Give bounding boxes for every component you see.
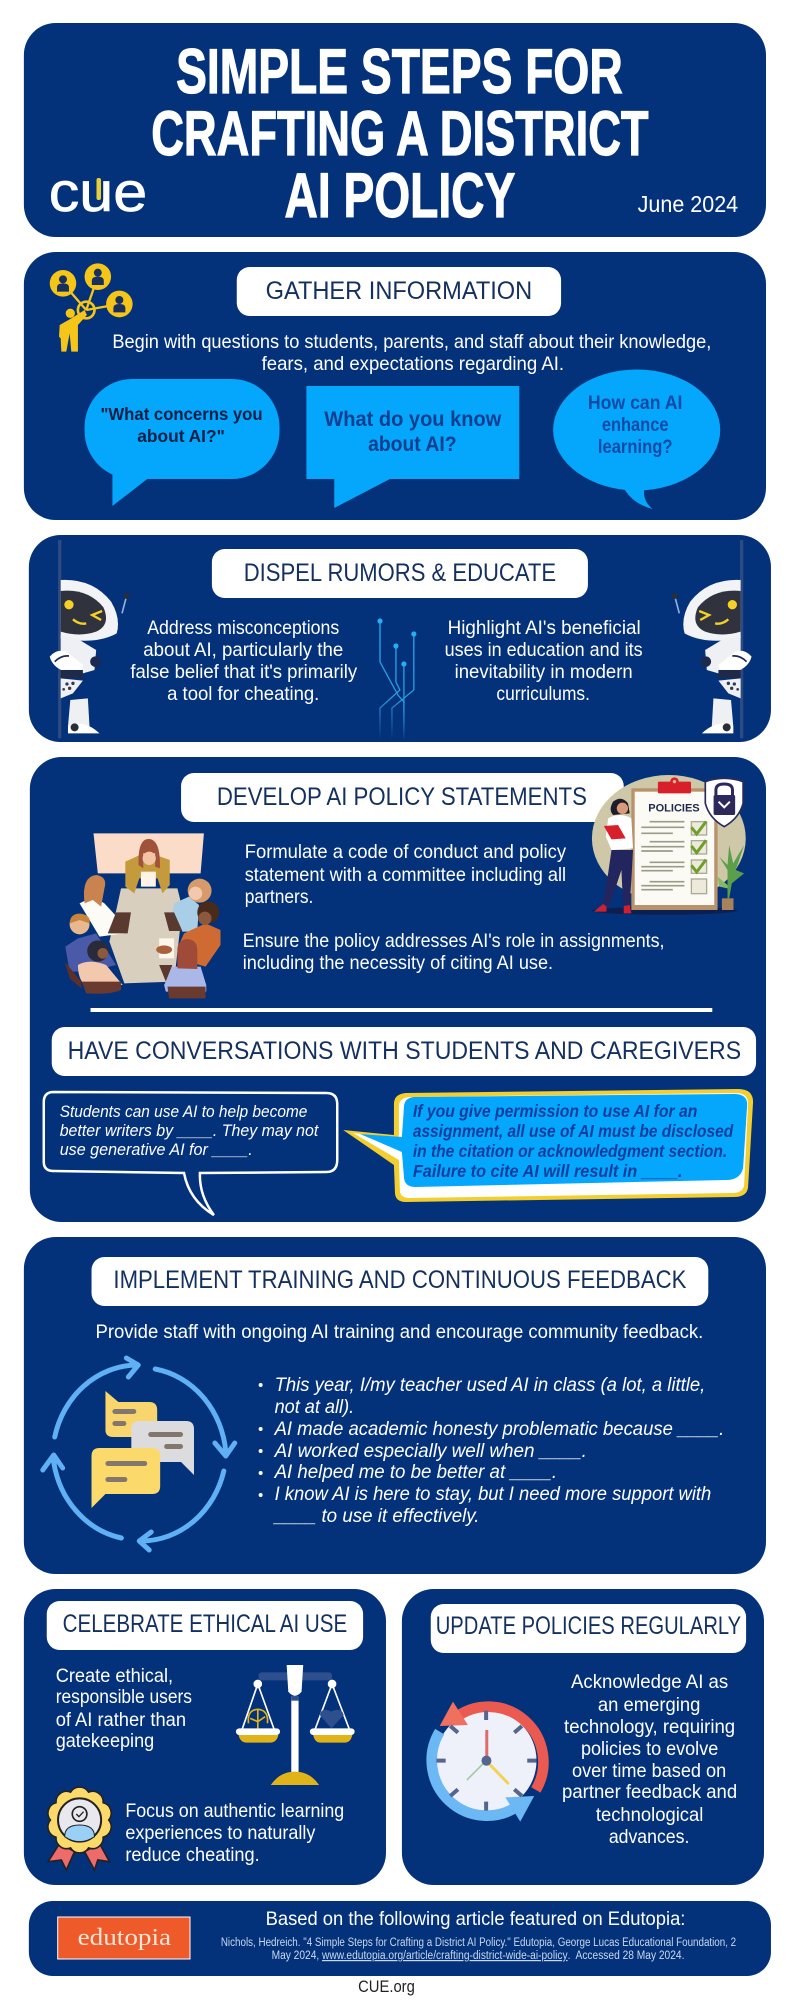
bullet list: AI worked especially well when ____. (274, 1441, 587, 1462)
icon: award badge (48, 1787, 111, 1870)
illustration: policies clipboard: POLICIES (648, 802, 700, 814)
callout: student bubble (44, 1092, 337, 1215)
text: acknowledge AI: technology, requiring (564, 1717, 735, 1738)
callout: student bubble: better writers by ____. They may not (60, 1121, 320, 1140)
text: source intro: Based on the following article featured on Edutopia: (266, 1909, 685, 1930)
heading: celebrate: CELEBRATE ETHICAL AI USE (63, 1610, 347, 1638)
footer: CUE.org: CUE.org (358, 1977, 415, 1996)
icon: circuit lines (377, 618, 416, 738)
text: authentic learning: experiences to naturally (125, 1823, 316, 1844)
speech bubble: enhance learning: enhance (602, 415, 669, 436)
speech bubble: what do you know: about AI? (368, 433, 457, 456)
panel: update policies (402, 1589, 764, 1885)
text: acknowledge AI: partner feedback and (562, 1782, 737, 1803)
bullet list: I know AI is here to stay, but I need more support with (275, 1484, 711, 1505)
logo: edutopia (58, 1917, 190, 1959)
speech bubble: concerns: about AI?" (137, 426, 225, 446)
text: code of conduct (245, 842, 567, 908)
callout: permission bubble: assignment, all use of AI must be disclosed (413, 1121, 733, 1141)
text: provide staff: Provide staff with ongoing AI training and encourage community feedback. (96, 1322, 703, 1343)
heading: have conversations (52, 1027, 756, 1076)
heading: update policies (431, 1604, 746, 1653)
icon: balance scale (236, 1665, 355, 1785)
panel: gather information (24, 252, 766, 520)
text: authentic learning (125, 1801, 344, 1866)
text: assignments (243, 931, 665, 974)
text: responsible users: Create ethical, (56, 1666, 173, 1687)
text: assignments: including the necessity of citing AI use. (243, 953, 553, 974)
heading: have conversations: HAVE CONVERSATIONS WITH STUDENTS AND CAREGIVERS (68, 1037, 741, 1065)
panel: celebrate ethical use (24, 1589, 386, 1885)
bullet list: ____ to use it effectively. (273, 1506, 479, 1527)
text: responsible users: gatekeeping (56, 1731, 154, 1752)
date: June 2024 (638, 191, 738, 217)
text: benefits: inevitability in modern (455, 662, 633, 683)
panel: title (24, 23, 766, 237)
illustration: policies clipboard (592, 775, 746, 915)
bullet list (259, 1375, 724, 1527)
text: acknowledge AI: over time based on (572, 1761, 726, 1782)
icon: feedback cycle (43, 1358, 235, 1550)
text: acknowledge AI: an emerging (598, 1695, 700, 1716)
robot: right (672, 540, 752, 738)
speech bubble: what do you know (306, 386, 519, 508)
text: misconceptions: false belief that it's primarily (130, 662, 358, 683)
callout: permission bubble (343, 1089, 753, 1202)
illustration: committee meeting (65, 833, 220, 998)
text: authentic learning: reduce cheating. (125, 1845, 260, 1866)
text: intro (112, 332, 711, 375)
text: benefits: Highlight AI's beneficial (448, 618, 641, 639)
text: code of conduct: Formulate a code of conduct and policy (245, 842, 567, 863)
text: misconceptions: Address misconceptions (147, 618, 339, 639)
heading: dispel rumors: DISPEL RUMORS & EDUCATE (244, 559, 556, 587)
text: benefits: uses in education and its (445, 640, 643, 661)
text: misconceptions: about AI, particularly the (143, 640, 343, 661)
text: misconceptions (130, 618, 358, 705)
title: AI POLICY (285, 161, 515, 231)
panel: source (29, 1901, 771, 1976)
heading: develop policy: DEVELOP AI POLICY STATEMENTS (217, 783, 587, 811)
text: acknowledge AI: Acknowledge AI as (571, 1672, 728, 1693)
logo: CUE: cue (49, 160, 147, 223)
text: benefits (445, 618, 643, 705)
text: misconceptions: a tool for cheating. (167, 684, 319, 705)
speech bubble: enhance learning: learning? (598, 437, 672, 458)
text: assignments: Ensure the policy addresses AI's role in assignments, (243, 931, 665, 952)
callout: student bubble: Students can use AI to help become (60, 1102, 307, 1121)
panel: policy statements and conversations (30, 757, 766, 1222)
callout: permission bubble: in the citation or acknowledgment section. (413, 1141, 727, 1161)
bullet list: AI helped me to be better at ____. (274, 1462, 557, 1483)
text: acknowledge AI: advances. (609, 1827, 689, 1848)
text: benefits: curriculums. (496, 684, 590, 705)
text: intro: Begin with questions to students, parents, and staff about their knowledge, (112, 332, 711, 353)
panel: dispel rumors (29, 535, 771, 742)
title: SIMPLE STEPS FOR (176, 37, 623, 107)
heading: gather information (237, 267, 561, 316)
text: code of conduct: partners. (245, 887, 313, 908)
logo: edutopia: edutopia (78, 1925, 172, 1951)
text: responsible users: of AI rather than (56, 1710, 186, 1731)
callout: student bubble: use generative AI for ____. (60, 1140, 253, 1159)
text: acknowledge AI: technological (596, 1805, 703, 1826)
bullet list: not at all). (275, 1397, 354, 1418)
bullet list: AI made academic honesty problematic because ____. (274, 1419, 724, 1440)
text: responsible users (56, 1666, 192, 1752)
heading: implement training: IMPLEMENT TRAINING AND CONTINUOUS FEEDBACK (113, 1266, 687, 1294)
text: code of conduct: statement with a committee including all (245, 865, 566, 886)
text: intro: fears, and expectations regarding AI. (262, 354, 564, 375)
icon: people network (50, 263, 133, 352)
text: acknowledge AI (562, 1672, 737, 1848)
speech bubble: enhance learning: How can AI (588, 393, 682, 414)
heading: develop policy (181, 773, 624, 822)
heading: gather information: GATHER INFORMATION (266, 277, 532, 305)
text: citation: May 2024, www.edutopia.org/article/crafting-district-wide-ai-policy. Accessed 28 May 2024. (272, 1948, 684, 1962)
heading: dispel rumors (212, 549, 588, 598)
text: responsible users: responsible users (56, 1687, 192, 1708)
speech bubble: enhance learning (553, 370, 720, 509)
panel: training and feedback (24, 1237, 766, 1574)
speech bubble: what do you know: What do you know (324, 408, 502, 431)
text: acknowledge AI: policies to evolve (581, 1739, 718, 1760)
callout: permission bubble: If you give permission to use AI for an (413, 1101, 697, 1121)
icon: clock (432, 1702, 543, 1822)
heading: implement training (92, 1257, 708, 1306)
heading: celebrate (47, 1601, 363, 1650)
speech bubble: concerns (85, 379, 280, 506)
title (151, 37, 649, 231)
robot: left (50, 540, 130, 738)
callout: permission bubble: Failure to cite AI will result in ____. (413, 1161, 682, 1181)
text: authentic learning: Focus on authentic learning (125, 1801, 344, 1822)
text: citation (221, 1935, 736, 1962)
speech bubble: concerns: "What concerns you (100, 404, 263, 424)
bullet list: This year, I/my teacher used AI in class (a lot, a little, (275, 1375, 705, 1396)
